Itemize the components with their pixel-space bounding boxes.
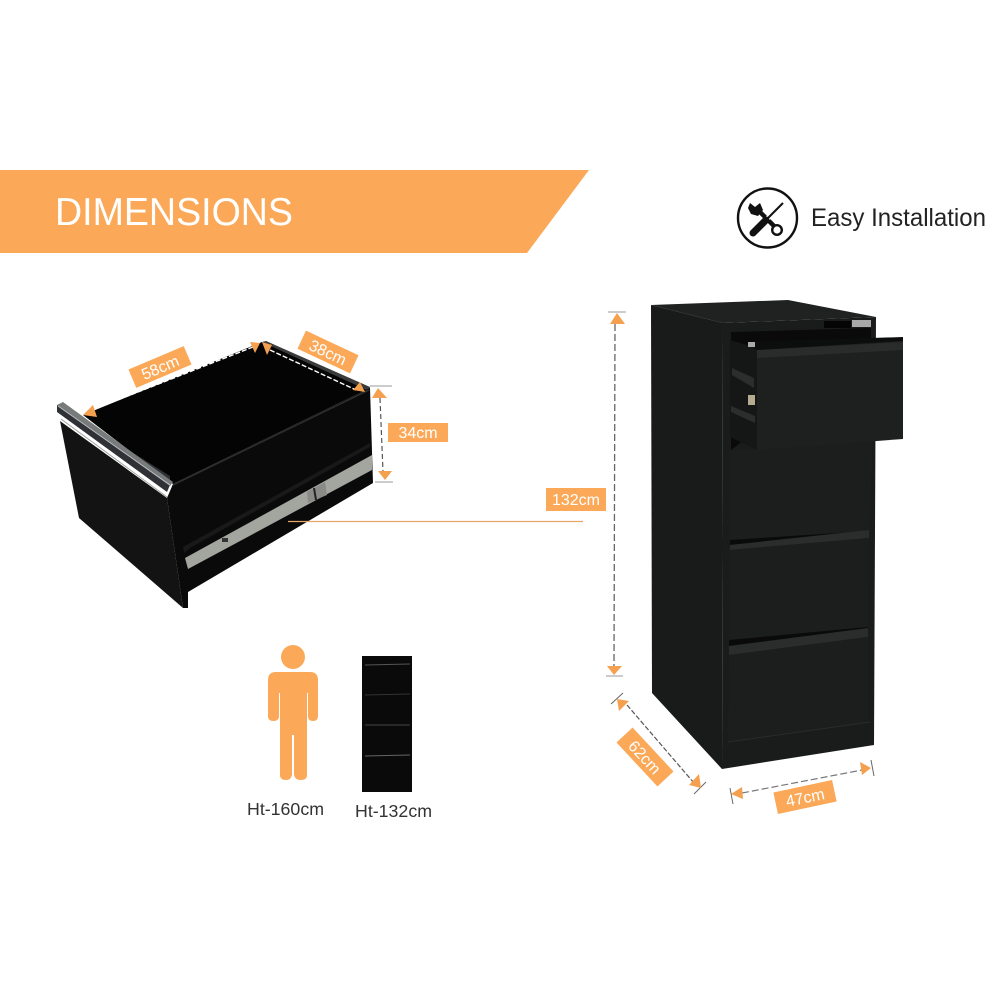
dimension: drawer length xyxy=(83,342,260,417)
drawer: side wall xyxy=(167,388,373,608)
text: cabinet height: Ht-132cm xyxy=(355,801,432,821)
banner: dimensions heading: DIMENSIONS xyxy=(55,191,293,234)
leader line and overall height label: 132cm xyxy=(552,492,600,509)
icon: small cabinet xyxy=(362,656,412,792)
cabinet: side xyxy=(651,305,723,769)
text: person height: Ht-160cm xyxy=(247,799,324,819)
dimension: cabinet height xyxy=(606,312,626,676)
cabinet: front xyxy=(722,317,876,769)
cabinet: open drawer front xyxy=(757,340,903,450)
dimension: drawer depth: 34cm xyxy=(398,425,438,442)
drawer: interior xyxy=(83,342,370,484)
dimension: drawer width: 38cm xyxy=(306,337,349,369)
cabinet: lock panel xyxy=(731,320,871,450)
dimension: cabinet depth xyxy=(611,693,706,794)
drawer: metal handle xyxy=(57,402,173,492)
drawer photo with measurements xyxy=(57,331,448,608)
icon: crossed wrench and screwdriver xyxy=(738,188,797,248)
drawer: runner rail xyxy=(185,455,372,569)
dimension: cabinet width: 47cm xyxy=(784,786,826,811)
leader line and overall height label xyxy=(288,488,606,522)
filing cabinet photo xyxy=(651,300,903,769)
cabinet: third drawer xyxy=(729,538,869,640)
cabinet: bottom drawer xyxy=(728,637,868,742)
dimension: cabinet depth: 62cm xyxy=(624,738,663,778)
cabinet: top xyxy=(651,300,876,323)
drawer: front panel xyxy=(60,421,183,608)
cabinet: open drawer side xyxy=(730,340,757,450)
dimension: drawer length: 58cm xyxy=(139,353,182,384)
size comparison: cabinet xyxy=(355,656,432,821)
dimension: cabinet width xyxy=(730,760,874,814)
icon: person xyxy=(268,645,318,780)
banner: dimensions heading xyxy=(0,170,589,253)
cabinet: second drawer xyxy=(730,440,873,540)
size comparison: person xyxy=(247,645,324,819)
cabinet: open drawer handle xyxy=(748,337,903,350)
dimension: drawer width xyxy=(262,331,365,392)
dimension: drawer depth xyxy=(370,386,448,482)
icon and label: easy installation xyxy=(738,188,986,248)
